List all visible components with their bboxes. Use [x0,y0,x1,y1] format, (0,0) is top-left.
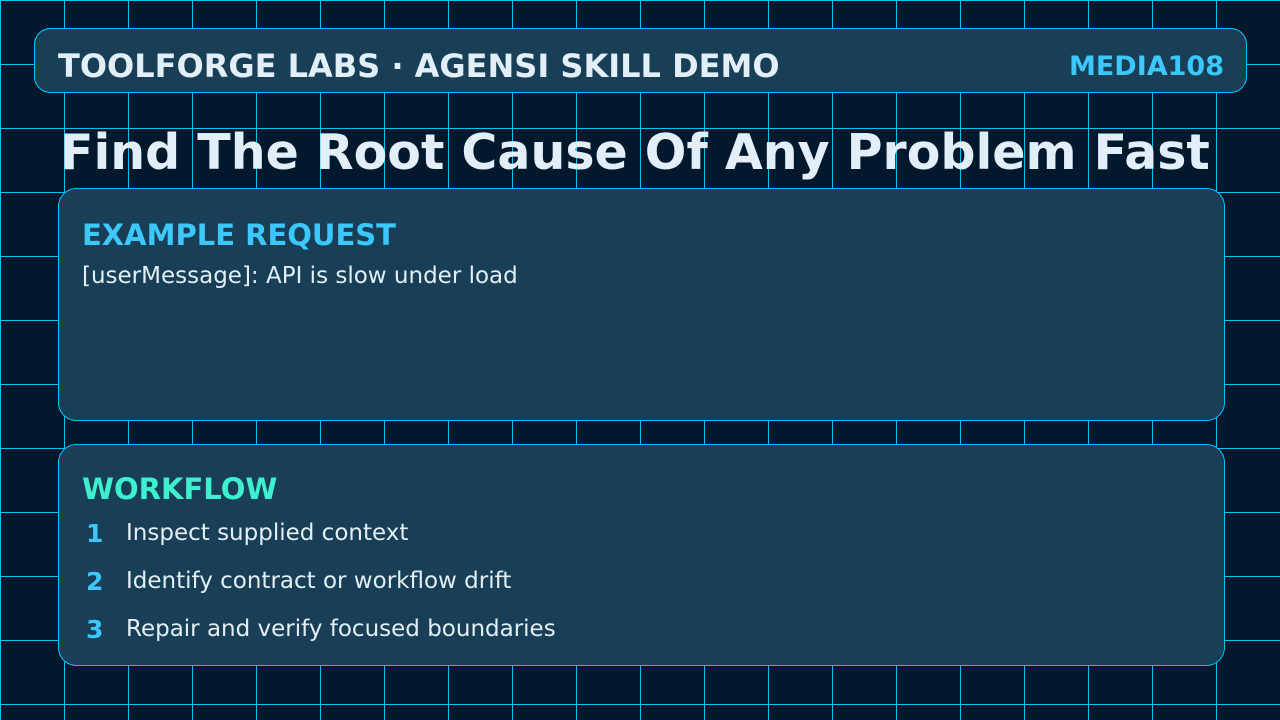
header code: MEDIA108 [1069,51,1224,82]
title: Find The Root Cause Of Any Problem Fast [60,124,1210,181]
step 2: Identify contract or workflow drift [126,568,511,594]
step 3: Repair and verify focused boundaries [126,616,556,642]
example request message: [userMessage]: API is slow under load [82,263,518,289]
step 2: 2 [86,567,103,596]
step 1: Inspect supplied context [126,520,408,546]
panel: workflow [58,444,1224,666]
panel: example request [58,188,1224,420]
header bar [34,28,1246,92]
workflow heading: WORKFLOW [82,472,277,506]
step 3: 3 [86,615,103,644]
step 1: 1 [86,519,103,548]
header label: TOOLFORGE LABS · AGENSI SKILL DEMO [58,47,780,85]
example request heading: EXAMPLE REQUEST [82,218,396,252]
